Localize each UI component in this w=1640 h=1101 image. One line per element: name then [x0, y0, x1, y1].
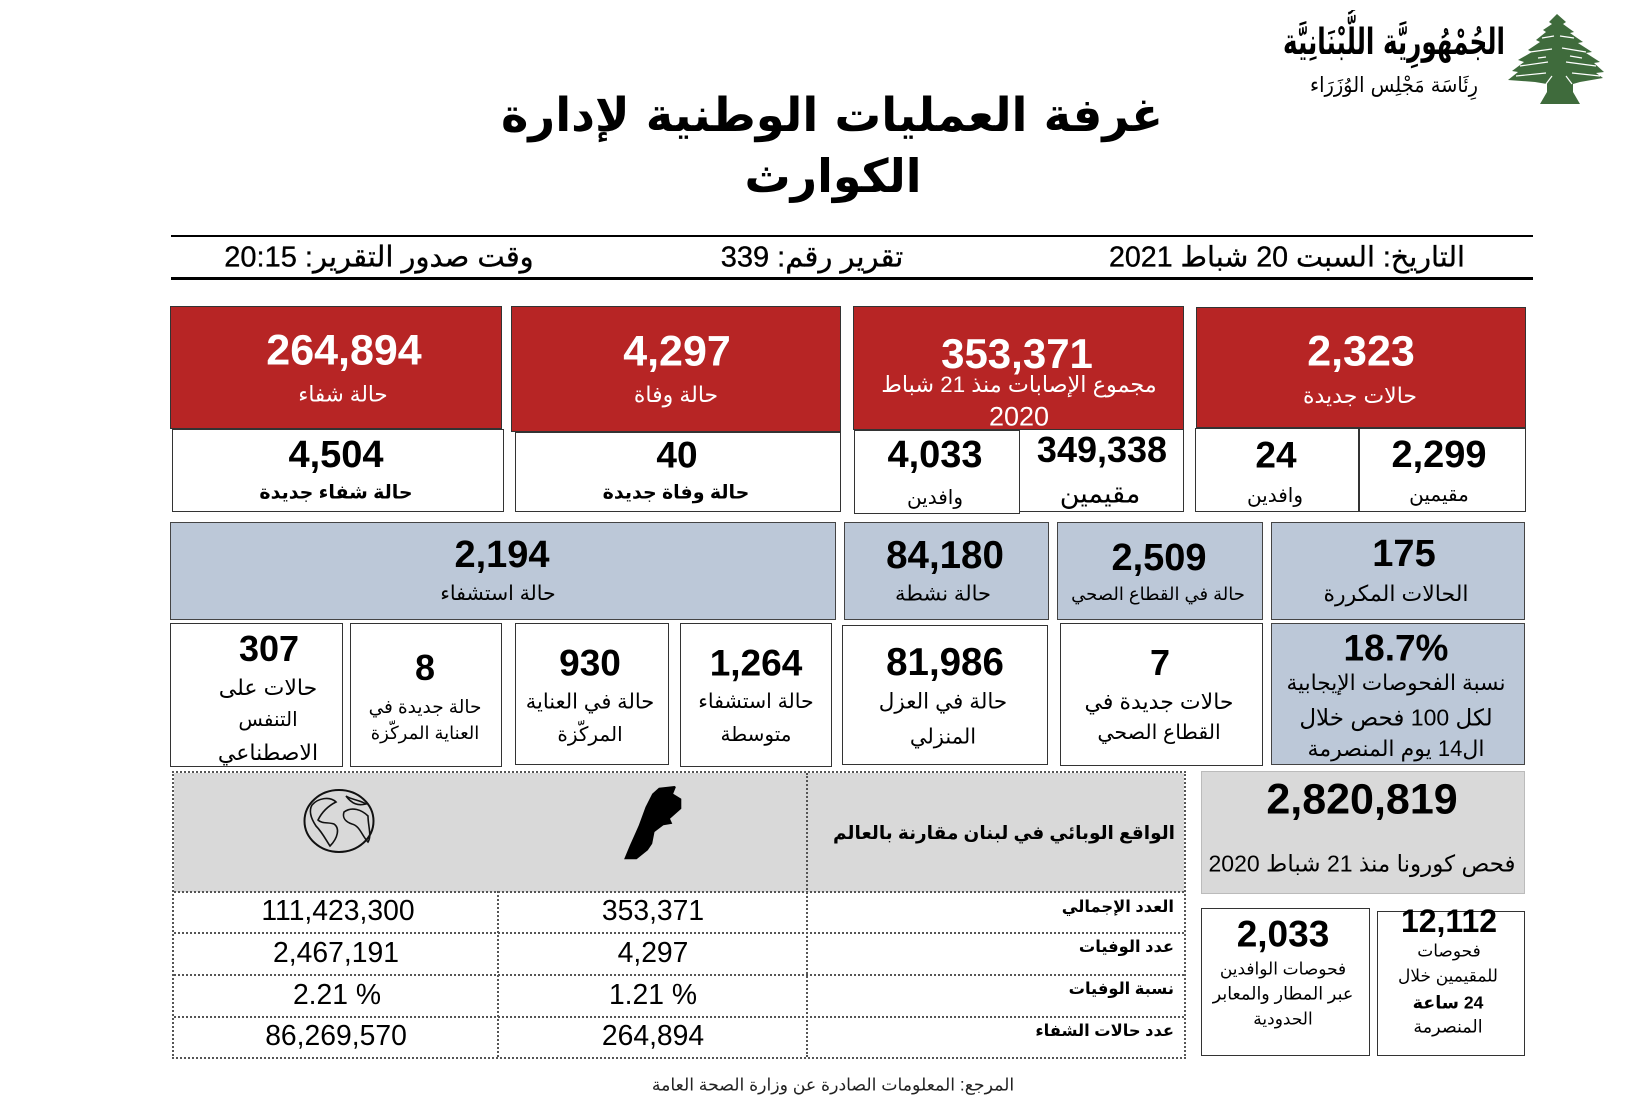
panel: hospitalised: 2,194 [454, 534, 550, 576]
panel: ventilator cases: 307 [239, 628, 299, 669]
row: deaths: 4,297 [618, 936, 688, 968]
panel: ICU cases [515, 623, 669, 765]
panel: moderate hospitalised: 1,264 [710, 642, 802, 684]
panel: residents tests [1377, 903, 1525, 1056]
panel: positivity rate: ال14 يوم المنصرمة [1308, 736, 1484, 761]
panel: total cases: مقيمين [1060, 478, 1140, 508]
panel: hospitalised [170, 522, 836, 620]
source note: المرجع: المعلومات الصادرة عن وزارة الصحة العامة [652, 1074, 1014, 1094]
panel: ventilator cases: حالات على [219, 675, 317, 700]
panel: arrivals tests: الحدودية [1253, 1010, 1313, 1028]
panel: ICU cases: 930 [559, 642, 621, 684]
panel: residents tests: 12,112 [1401, 903, 1497, 939]
title [501, 88, 1163, 204]
panel: total cases [853, 306, 1184, 514]
report time: وقت صدور التقرير: 20:15 [224, 242, 534, 274]
panel: residents tests: للمقيمين خلال [1398, 966, 1498, 986]
row: total cases: العدد الإجمالي [1062, 898, 1174, 916]
title: غرفة العمليات الوطنية لإدارة [501, 88, 1163, 142]
panel: deaths: حالة وفاة جديدة [603, 482, 749, 504]
panel: ventilator cases [170, 623, 343, 767]
total cases number: 353,371 [941, 330, 1093, 377]
icon: cedar tree [1508, 14, 1604, 104]
row: deaths: 2,467,191 [273, 936, 399, 968]
panel: new health sector cases: حالات جديدة في [1085, 689, 1233, 714]
row: death rate: نسبة الوفيات [1069, 980, 1174, 998]
panel: residents tests: 24 ساعة [1413, 992, 1483, 1012]
new arrivals: 24 [1255, 434, 1297, 476]
row: total cases [261, 894, 1174, 926]
panel: ICU cases: المركّزة [557, 724, 623, 746]
panel: total tests: 2,820,819 [1266, 776, 1458, 824]
panel: new health sector cases [1060, 623, 1263, 766]
panel: arrivals tests [1201, 908, 1370, 1056]
panel: new cases: حالات جديدة [1303, 383, 1417, 408]
row: deaths [273, 936, 1174, 968]
total deaths: 4,297 [623, 328, 731, 376]
report number: تقرير رقم: 339 [721, 242, 903, 274]
panel: deaths [511, 306, 841, 512]
new cases number: 2,323 [1307, 328, 1415, 376]
panel: repeat cases: الحالات المكررة [1323, 581, 1469, 606]
panel: moderate hospitalised: حالة استشفاء [698, 690, 814, 713]
row: recoveries [265, 1019, 1174, 1051]
panel: deaths: حالة وفاة [634, 382, 718, 407]
logo calligraphy text [1283, 10, 1505, 100]
report date: التاريخ: السبت 20 شباط 2021 [1109, 242, 1465, 274]
panel: ventilator cases: التنفس [238, 709, 298, 731]
panel: new cases: وافدين [1247, 485, 1303, 507]
row: recoveries: عدد حالات الشفاء [1035, 1022, 1174, 1040]
row: total cases: 353,371 [602, 894, 704, 926]
panel: health sector cases: 2,509 [1111, 537, 1207, 579]
row: total cases: 111,423,300 [261, 894, 415, 926]
panel: arrivals tests: عبر المطار والمعابر [1213, 983, 1353, 1003]
panel: recoveries: حالة شفاء جديدة [259, 482, 413, 504]
panel: new ICU cases: حالة جديدة في [369, 696, 481, 717]
panel: positivity rate: 18.7% [1344, 628, 1448, 668]
panel: positivity rate: نسبة الفحوصات الإيجابية [1286, 670, 1506, 695]
panel: recoveries: حالة شفاء [298, 382, 388, 406]
panel: active cases: 84,180 [886, 534, 1004, 577]
panel: health sector cases [1057, 522, 1263, 620]
panel: active cases: حالة نشطة [895, 582, 991, 606]
row: death rate [293, 978, 1174, 1010]
new residents: 2,299 [1391, 434, 1487, 476]
panel: repeat cases [1271, 522, 1525, 620]
row: deaths: عدد الوفيات [1079, 938, 1174, 956]
logo calligraphy text: رِئَاسَة مَجْلِس الوُزَرَاء [1310, 73, 1478, 100]
panel: residents tests: المنصرمة [1413, 1016, 1483, 1036]
panel: home isolation: حالة في العزل [879, 689, 1007, 713]
panel: new cases [1195, 307, 1526, 512]
row: death rate: 2.21 % [293, 978, 381, 1010]
panel: positivity rate [1271, 623, 1525, 765]
panel: moderate hospitalised [680, 623, 832, 767]
panel: total cases: 2020 [989, 402, 1049, 432]
panel: home isolation: المنزلي [910, 726, 976, 748]
panel: home isolation: 81,986 [886, 641, 1004, 684]
panel: total tests: فحص كورونا منذ 21 شباط 2020 [1208, 850, 1516, 876]
panel: residents tests: فحوصات [1417, 942, 1481, 960]
panel: total cases: وافدين [907, 487, 963, 509]
row: recoveries: 86,269,570 [265, 1019, 407, 1051]
panel: ventilator cases: الاصطناعي [218, 740, 318, 765]
panel: moderate hospitalised: متوسطة [721, 724, 791, 746]
new deaths: 40 [656, 434, 698, 476]
row: death rate: 1.21 % [609, 978, 697, 1010]
panel: arrivals tests: 2,033 [1237, 914, 1329, 954]
panel: home isolation [842, 625, 1048, 765]
panel: new ICU cases [350, 623, 502, 767]
panel: repeat cases: 175 [1372, 533, 1436, 575]
panel: new health sector cases: 7 [1150, 642, 1170, 683]
icon: map of Lebanon [624, 786, 682, 860]
panel: new ICU cases: 8 [415, 647, 435, 688]
total recoveries: 264,894 [266, 326, 422, 374]
panel: active cases [844, 522, 1049, 620]
comparison table: Lebanon vs world [172, 771, 1186, 1059]
panel: total tests [1201, 771, 1525, 894]
title: الكوارث [744, 149, 922, 203]
table heading: الواقع الوبائي في لبنان مقارنة بالعالم [833, 822, 1175, 843]
logo: Lebanese Republic, Presidency of the Council of Ministers [1283, 10, 1604, 104]
panel: new cases: مقيمين [1409, 484, 1469, 506]
residents: 349,338 [1037, 429, 1167, 470]
panel: new ICU cases: العناية المركّزة [371, 723, 479, 743]
panel: ICU cases: حالة في العناية [526, 690, 654, 714]
icon: globe [304, 789, 374, 853]
panel: total cases: مجموع الإصابات منذ 21 شباط [881, 372, 1157, 397]
panel: health sector cases: حالة في القطاع الصحي [1071, 584, 1245, 604]
report info bar [171, 235, 1533, 280]
panel: recoveries [170, 306, 504, 512]
arrivals: 4,033 [887, 434, 983, 476]
panel: new health sector cases: القطاع الصحي [1097, 721, 1221, 744]
new recoveries: 4,504 [288, 434, 384, 476]
panel: positivity rate: لكل 100 فحص خلال [1299, 704, 1493, 730]
row: recoveries: 264,894 [602, 1019, 704, 1051]
panel: hospitalised: حالة استشفاء [440, 582, 556, 605]
panel: arrivals tests: فحوصات الوافدين [1220, 960, 1346, 978]
